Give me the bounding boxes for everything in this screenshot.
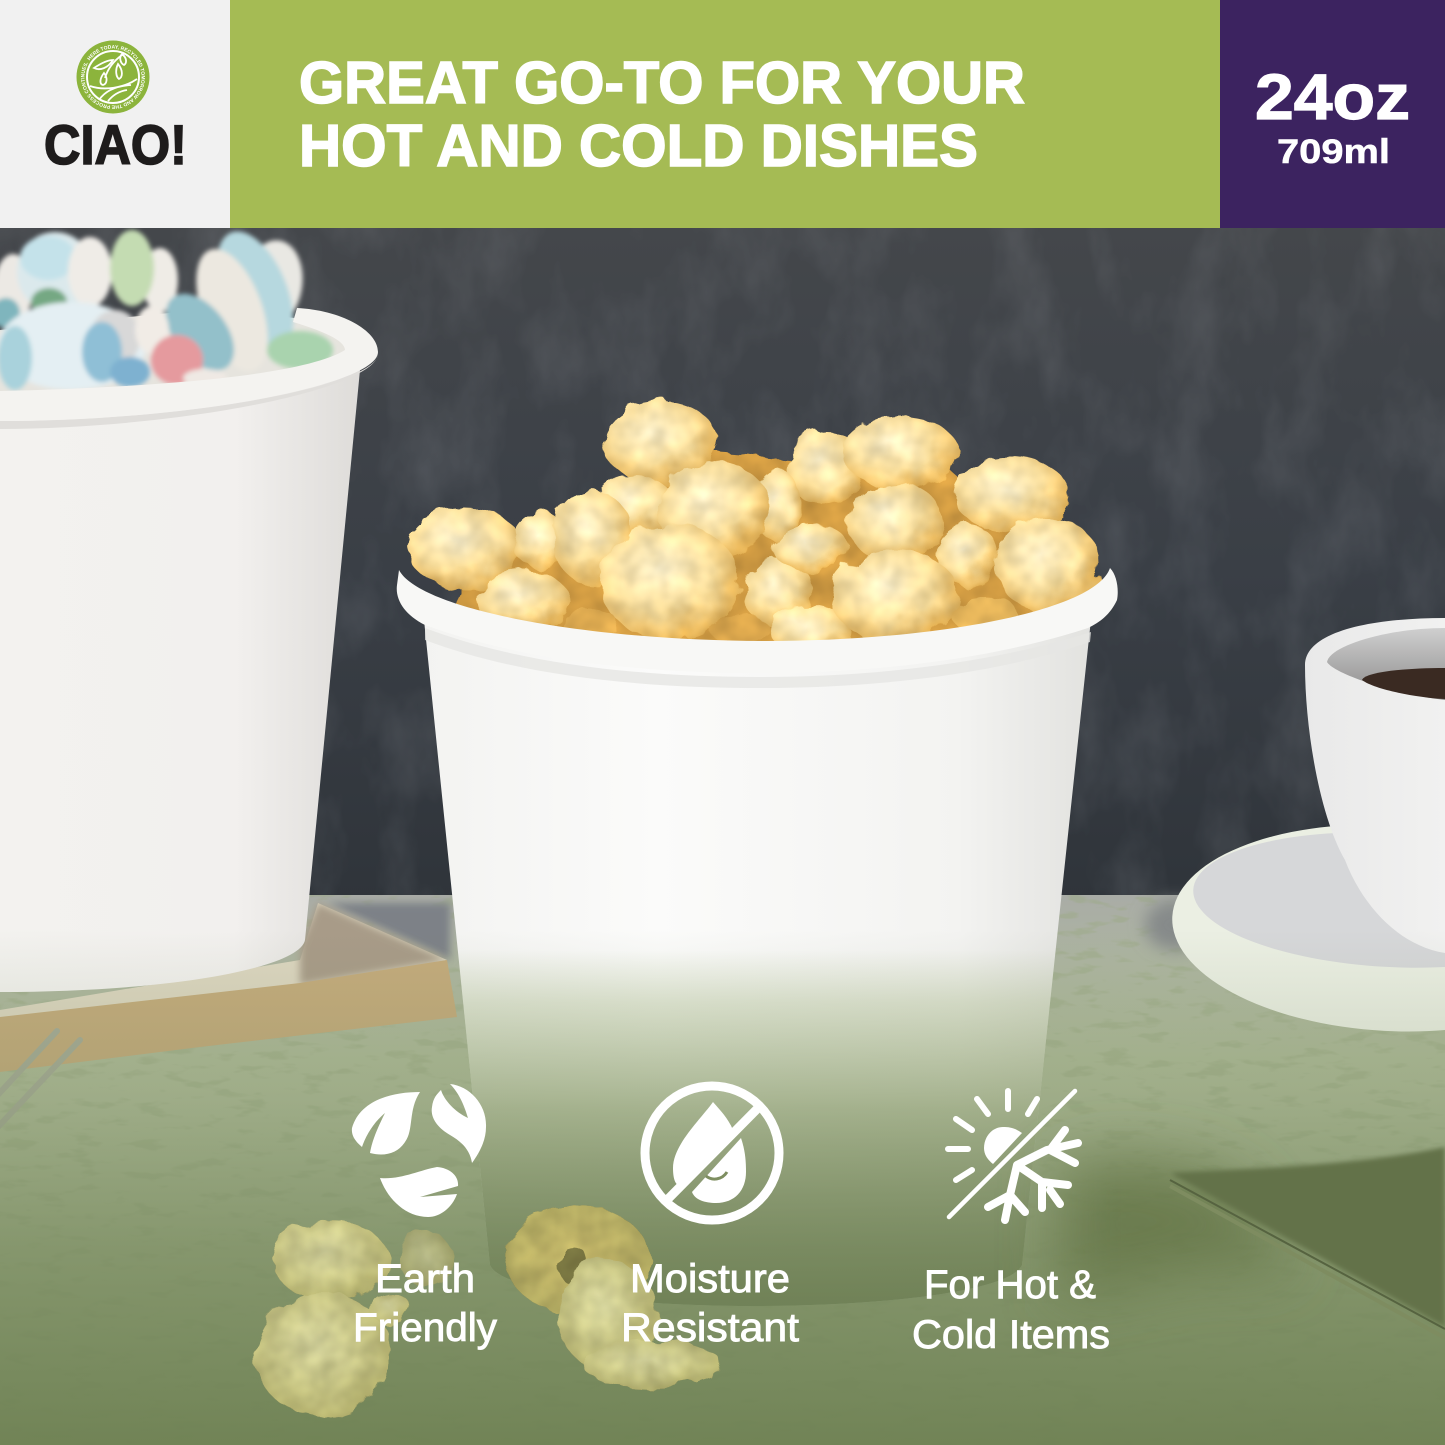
popcorn in central bucket (407, 401, 1100, 654)
label: Earth (375, 1257, 475, 1301)
icon: crossed-out water drop (645, 1086, 779, 1220)
feature: earth friendly (352, 1084, 497, 1350)
header band (0, 0, 1445, 228)
headline line 2: HOT AND COLD DISHES (299, 113, 978, 179)
icon: recycling badge: HERE TODAY, RECYCLED TOMORROW AND THE PROCESS CONTINUES. (80, 45, 145, 109)
marshmallows (0, 221, 333, 390)
left bucket rim (0, 308, 378, 421)
feature: moisture resistant (621, 1086, 799, 1350)
fallen popcorn (255, 1206, 722, 1417)
feature: hot and cold (912, 1091, 1110, 1357)
fork (0, 1031, 80, 1130)
label: Friendly (353, 1306, 497, 1350)
paper sheet at lower right (1170, 1147, 1445, 1338)
label: Resistant (621, 1306, 799, 1350)
wooden board (0, 903, 457, 1072)
cast shadow beside bucket (1060, 1159, 1300, 1300)
central paper bucket (397, 568, 1118, 1306)
label: For Hot & (924, 1263, 1096, 1307)
bottom green gradient overlay (0, 930, 1445, 1445)
left paper bucket (0, 310, 378, 992)
wordmark: CIAO! (44, 113, 187, 176)
headline line 1: GREAT GO-TO FOR YOUR (299, 50, 1025, 116)
label: Moisture (630, 1257, 790, 1301)
panel: size (1220, 0, 1445, 228)
icon: sun and snowflake (948, 1091, 1078, 1220)
size in ounces: 24oz (1255, 61, 1410, 133)
icon: three leaves (352, 1084, 486, 1217)
coffee cup and saucer (1167, 618, 1445, 1042)
size in millilitres: 709ml (1277, 133, 1390, 171)
panel: headline (230, 0, 1220, 228)
label: Cold Items (912, 1313, 1110, 1357)
green stone table (0, 895, 1445, 1445)
panel: logo (0, 0, 230, 228)
slate wall (0, 228, 1445, 908)
